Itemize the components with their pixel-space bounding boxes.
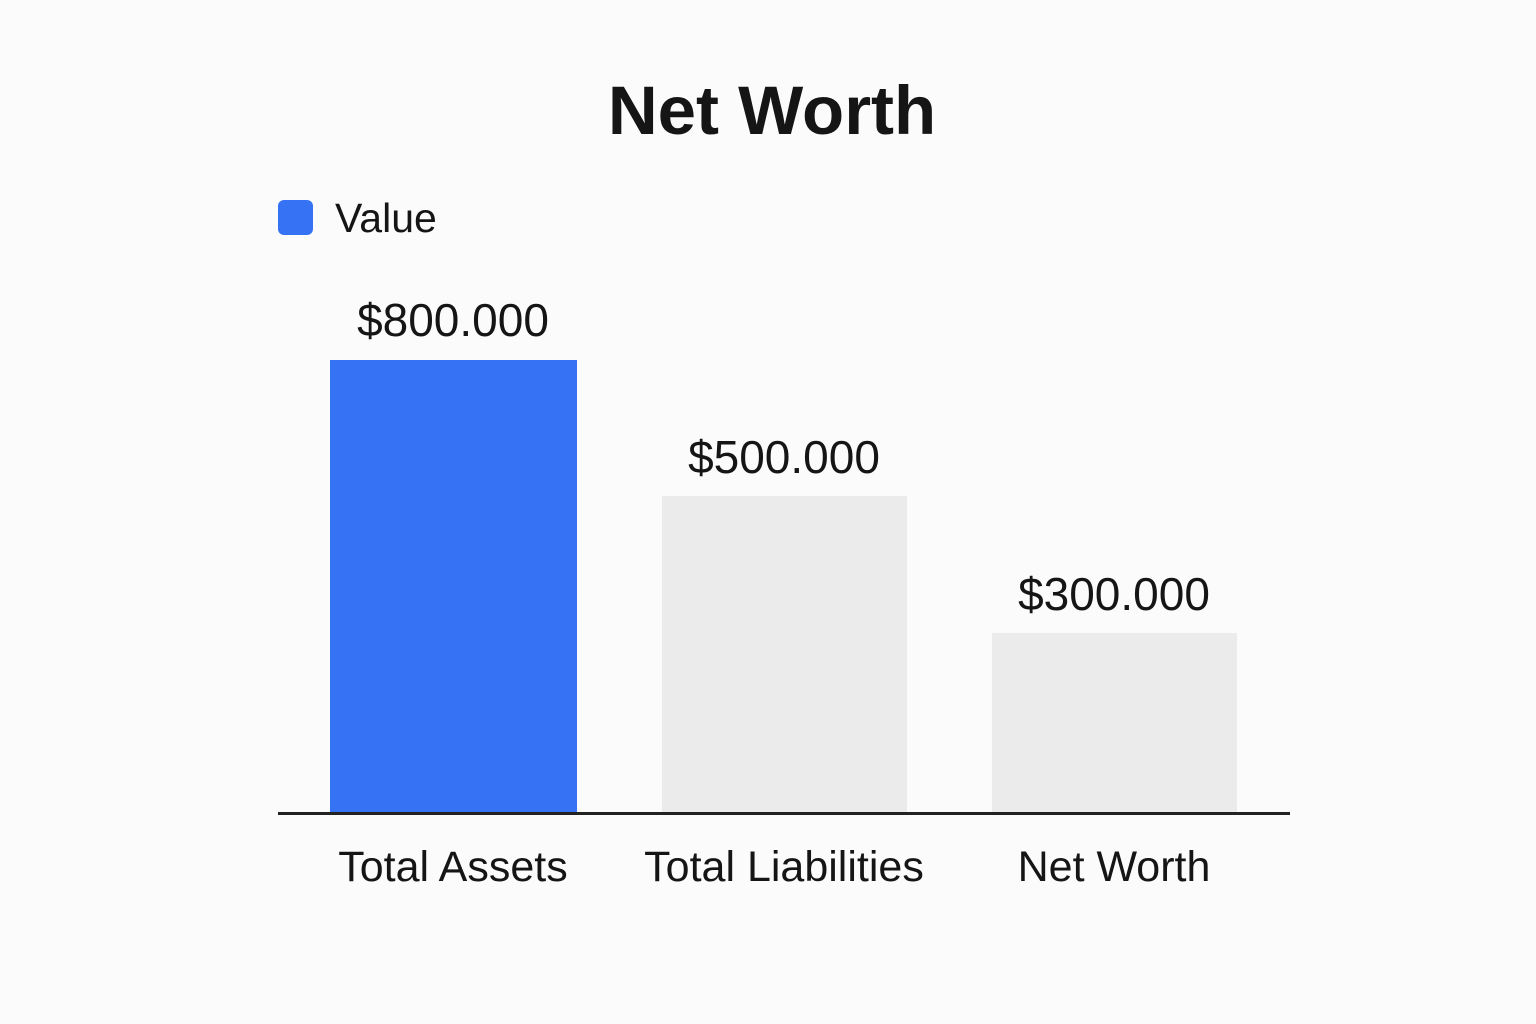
- title: Net Worth: [608, 72, 936, 149]
- legend: [278, 195, 437, 241]
- bar: net worth: [992, 633, 1237, 812]
- legend label: Value: [335, 195, 437, 241]
- bar: total liabilities: [662, 496, 907, 812]
- axis label: net worth: Net Worth: [1018, 843, 1210, 891]
- value label: total liabilities: $500.000: [688, 431, 880, 483]
- axis label: total assets: Total Assets: [338, 843, 568, 891]
- axis label: total liabilities: Total Liabilities: [644, 843, 924, 891]
- value label: total assets: $800.000: [357, 294, 549, 346]
- axis line: [278, 812, 1290, 815]
- value label: net worth: $300.000: [1018, 568, 1210, 620]
- bar chart: [278, 294, 1290, 891]
- legend swatch: [278, 200, 313, 235]
- bar: total assets: [330, 360, 577, 814]
